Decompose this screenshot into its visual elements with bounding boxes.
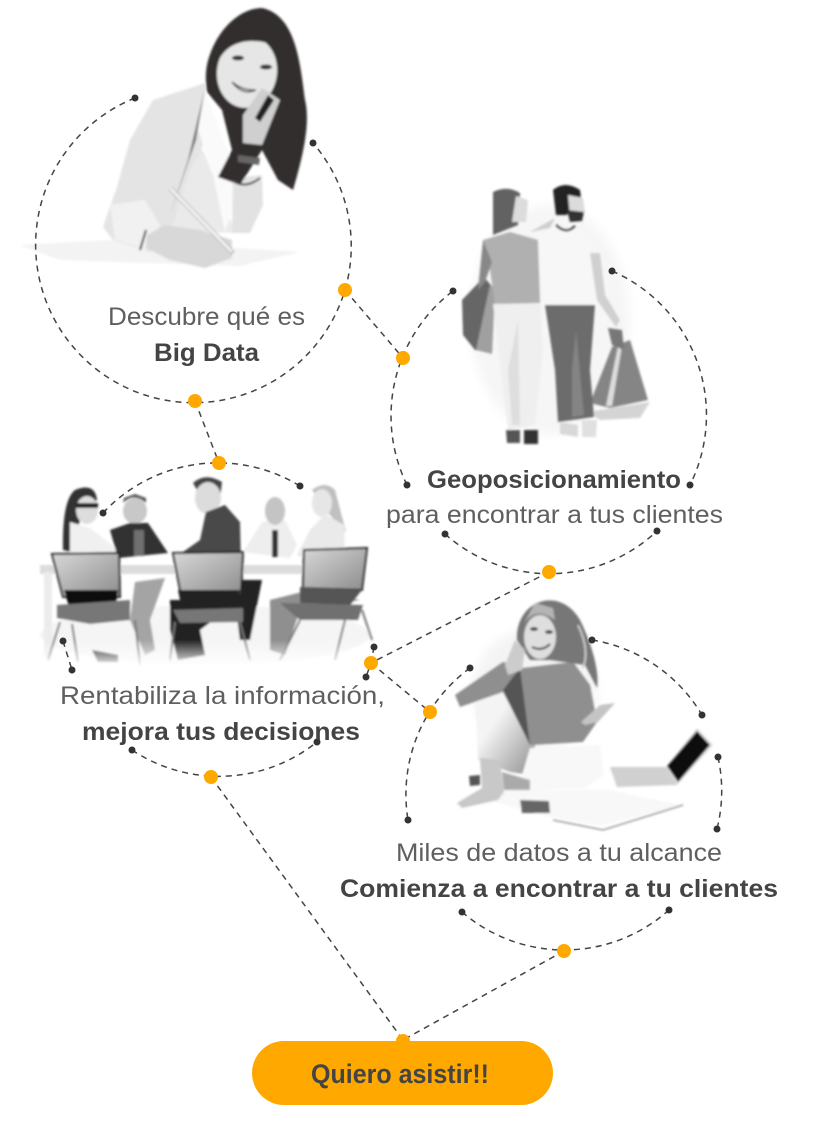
dashed circle: Rentabiliza <box>60 456 378 784</box>
text: Miles de datos: Miles de datos a tu alcance <box>396 839 722 867</box>
dashed circle: Big Data <box>36 94 352 408</box>
dashed circle: Miles de datos <box>404 636 722 958</box>
text: Geoposicionamiento: Geoposicionamiento <box>427 466 681 494</box>
button: Quiero asistir <box>252 1034 553 1105</box>
text: Miles de datos: Comienza a encontrar a tu clientes <box>340 875 778 903</box>
text: Rentabiliza la información: Rentabiliza la información, <box>60 682 385 710</box>
text: Descubre qué es Big Data <box>108 303 305 367</box>
photo: woman sitting with laptop <box>455 600 713 830</box>
text: Miles de datos <box>340 839 778 903</box>
button: Quiero asistir: Quiero asistir!! <box>311 1059 489 1089</box>
text: Descubre qué es Big Data: Big Data <box>154 339 260 367</box>
text: Rentabiliza la información: mejora tus decisiones <box>82 718 360 746</box>
dashed circle: Geoposicionamiento <box>391 268 706 579</box>
connector lines between circles <box>195 290 564 1040</box>
photo: woman on the phone writing <box>20 8 307 268</box>
text: Rentabiliza la información <box>60 682 385 746</box>
photo: business team at a table <box>30 477 375 668</box>
text: Geoposicionamiento: para encontrar a tus clientes <box>386 501 723 529</box>
text: Descubre qué es Big Data: Descubre qué es <box>108 303 305 331</box>
text: Geoposicionamiento <box>386 466 723 529</box>
photo: couple with shopping bags <box>462 185 650 444</box>
